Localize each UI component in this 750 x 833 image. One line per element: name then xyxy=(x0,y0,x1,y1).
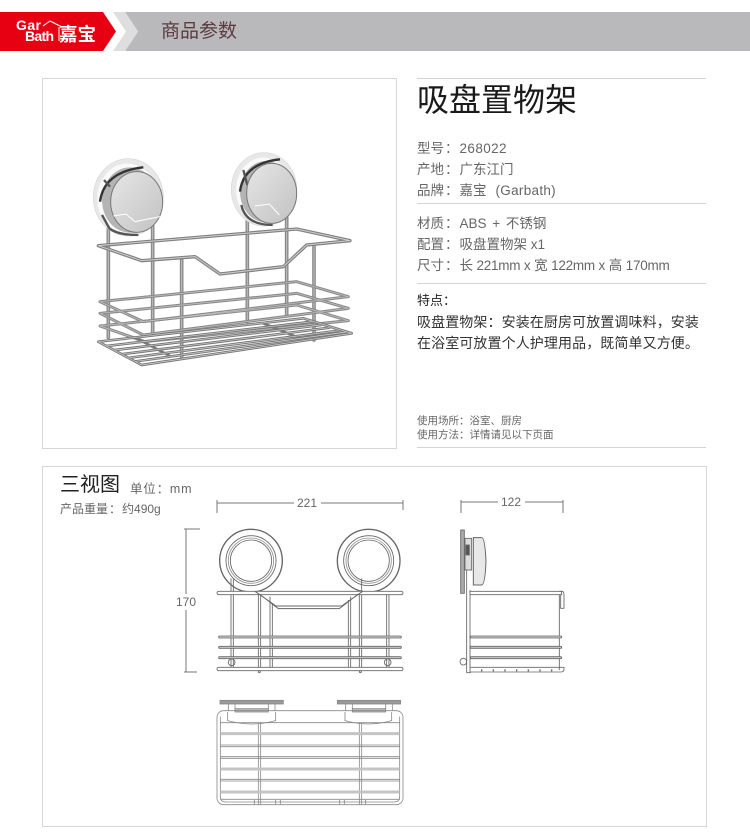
spec: brand: 品牌：嘉宝 (Garbath) xyxy=(417,179,556,199)
header banner xyxy=(0,12,750,51)
rule xyxy=(417,203,706,204)
logo wordmark Chinese: 嘉宝 xyxy=(59,21,96,47)
panel: product photo xyxy=(42,78,397,449)
spec: origin: 产地：广东江门 xyxy=(417,158,514,178)
rule above product name xyxy=(417,78,706,79)
front view xyxy=(217,529,403,673)
left suction cup xyxy=(93,159,163,236)
panel: three views xyxy=(42,466,707,827)
three views heading: 三视图 xyxy=(60,474,120,496)
spec: configuration: 配置：吸盘置物架 x1 xyxy=(417,233,545,253)
header title: 商品参数 xyxy=(161,21,237,42)
spec: model: 型号：268022 xyxy=(417,137,507,157)
features description line one: 吸盘置物架：安装在厨房可放置调味料，安装 xyxy=(417,312,699,332)
product weight: 产品重量：约490g xyxy=(60,500,161,517)
rule xyxy=(417,283,706,284)
features description line two: 在浴室可放置个人护理用品，既简单又方便。 xyxy=(417,335,699,351)
red logo band xyxy=(0,12,116,51)
basket floor xyxy=(98,318,352,365)
height dimension 170: 170 xyxy=(176,595,196,609)
usage method: 使用方法：详情请见以下页面 xyxy=(417,427,554,442)
light chevron xyxy=(113,12,138,51)
usage place: 使用场所：浴室、厨房 xyxy=(417,413,522,428)
logo wordmark Bath: Bath xyxy=(25,28,54,44)
top view xyxy=(217,700,403,805)
depth dimension 122: 122 xyxy=(501,495,521,509)
width dimension 221 xyxy=(217,496,403,513)
right suction cup xyxy=(231,153,297,226)
grey title band xyxy=(125,12,750,51)
width dimension 221: 221 xyxy=(297,496,317,510)
features heading: 特点： xyxy=(417,290,456,309)
logo wordmark Gar: Gar xyxy=(16,17,42,33)
spec: size: 尺寸：长 221mm x 宽 122mm x 高 170mm xyxy=(417,254,669,274)
unit label: 单位：mm xyxy=(130,478,192,497)
spec: material: 材质：ABS + 不锈钢 xyxy=(417,212,546,232)
rule xyxy=(417,447,706,448)
height dimension 170 xyxy=(176,529,200,672)
product name: 吸盘置物架 xyxy=(417,82,577,118)
depth dimension 122 xyxy=(461,495,563,513)
side view xyxy=(460,530,564,673)
logo house roof xyxy=(43,21,62,41)
product photo: suction cup rack xyxy=(93,152,353,366)
wire basket xyxy=(98,208,352,365)
